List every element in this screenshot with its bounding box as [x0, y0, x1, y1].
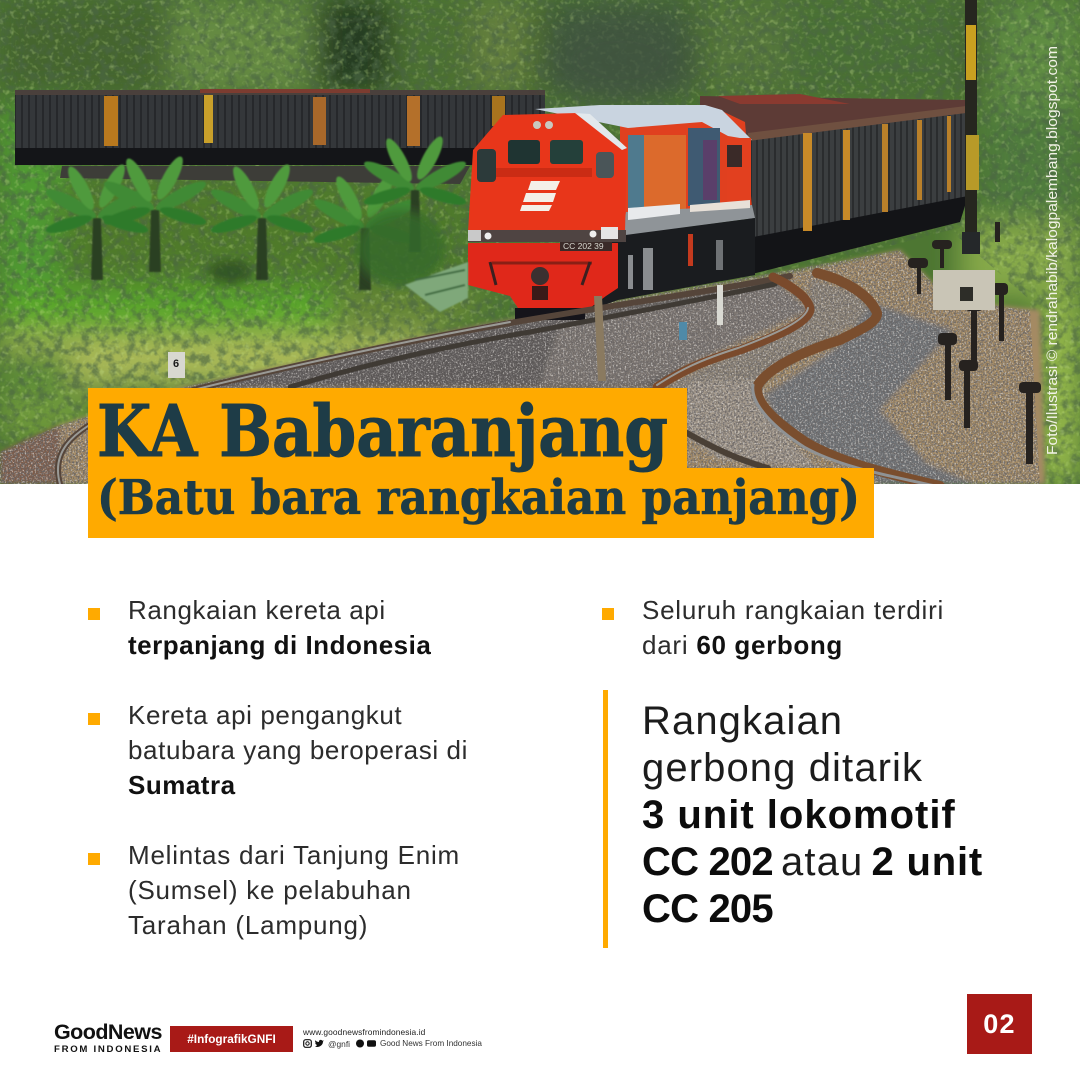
rear hood [620, 110, 752, 225]
bullet: coal carrier in Sumatra: batubara yang beroperasi di [128, 735, 468, 765]
bullet: coal carrier in Sumatra: Kereta api pengangkut [128, 700, 402, 730]
locomotive CC 202 [468, 105, 755, 320]
cab front [468, 113, 627, 232]
footer links [303, 1027, 482, 1049]
bullet: coal carrier in Sumatra [88, 700, 468, 800]
footer links: Good News From Indonesia [380, 1039, 482, 1048]
bullet: coal carrier in Sumatra: Sumatra [128, 770, 236, 800]
footer links: www.goodnewsfromindonesia.id [303, 1027, 425, 1037]
marker posts and relay box: 6 [173, 358, 179, 370]
ground and ballast [0, 248, 1047, 484]
track posts [908, 222, 1041, 464]
social icons [303, 1039, 376, 1048]
logo [520, 181, 560, 211]
forest background [0, 0, 1080, 484]
title: KA Babaranjang: KA Babaranjang [97, 389, 668, 473]
bullet: 60 wagons: dari 60 gerbong [642, 630, 843, 660]
bullet: 60 wagons [602, 595, 944, 660]
callout text: CC 205 [642, 887, 773, 931]
callout text: gerbong ditarik [642, 746, 923, 790]
bullet: longest train: Rangkaian kereta api [128, 595, 386, 625]
callout text: 3 unit lokomotif [642, 793, 956, 837]
bullet: longest train: terpanjang di Indonesia [128, 630, 431, 660]
signal mast [962, 0, 980, 254]
footer links: @gnfi [328, 1039, 350, 1049]
rear coal wagons [15, 89, 545, 184]
undercarriage [585, 218, 755, 312]
bullet: route [88, 840, 460, 940]
title block [88, 388, 874, 538]
callout text: Rangkaian [642, 699, 843, 743]
bullet: route: (Sumsel) ke pelabuhan [128, 875, 412, 905]
page number badge: 02 [983, 1009, 1016, 1039]
title highlight: second line [88, 468, 874, 538]
headlight bar [468, 230, 626, 242]
footer logo: GoodNews From Indonesia [54, 1020, 162, 1055]
photo credit: Foto/Ilustrasi © rendrahabib/kalogpalembang.blogspot.com [1045, 46, 1061, 455]
page number badge [967, 994, 1032, 1054]
marker posts and relay box [168, 270, 995, 381]
wagons behind the locomotive [700, 94, 968, 275]
footer logo: GoodNews From Indonesia: FROM INDONESIA [54, 1044, 162, 1055]
footer hashtag tag: #InfografikGNFI [187, 1032, 276, 1046]
footer hashtag tag [170, 1026, 293, 1052]
cab windows [477, 149, 496, 182]
banana plants [43, 134, 469, 312]
nose [468, 243, 618, 308]
callout text: CC 202 atau 2 unit [642, 840, 983, 884]
title highlight: first line [88, 388, 687, 472]
smoke [550, 16, 690, 104]
railway tracks [58, 273, 940, 487]
callout accent bar [603, 690, 608, 948]
footer logo: GoodNews From Indonesia: GoodNews [54, 1020, 162, 1044]
background photo: coal train on curved railway [0, 0, 1080, 484]
callout: locomotives [603, 690, 983, 948]
bullet: longest train [88, 595, 431, 660]
locomotive CC 202: CC 202 39 [563, 241, 604, 251]
bullet: 60 wagons: Seluruh rangkaian terdiri [642, 595, 944, 625]
bullet: route: Melintas dari Tanjung Enim [128, 840, 460, 870]
bullet: route: Tarahan (Lampung) [128, 910, 368, 940]
callout text [642, 699, 983, 931]
